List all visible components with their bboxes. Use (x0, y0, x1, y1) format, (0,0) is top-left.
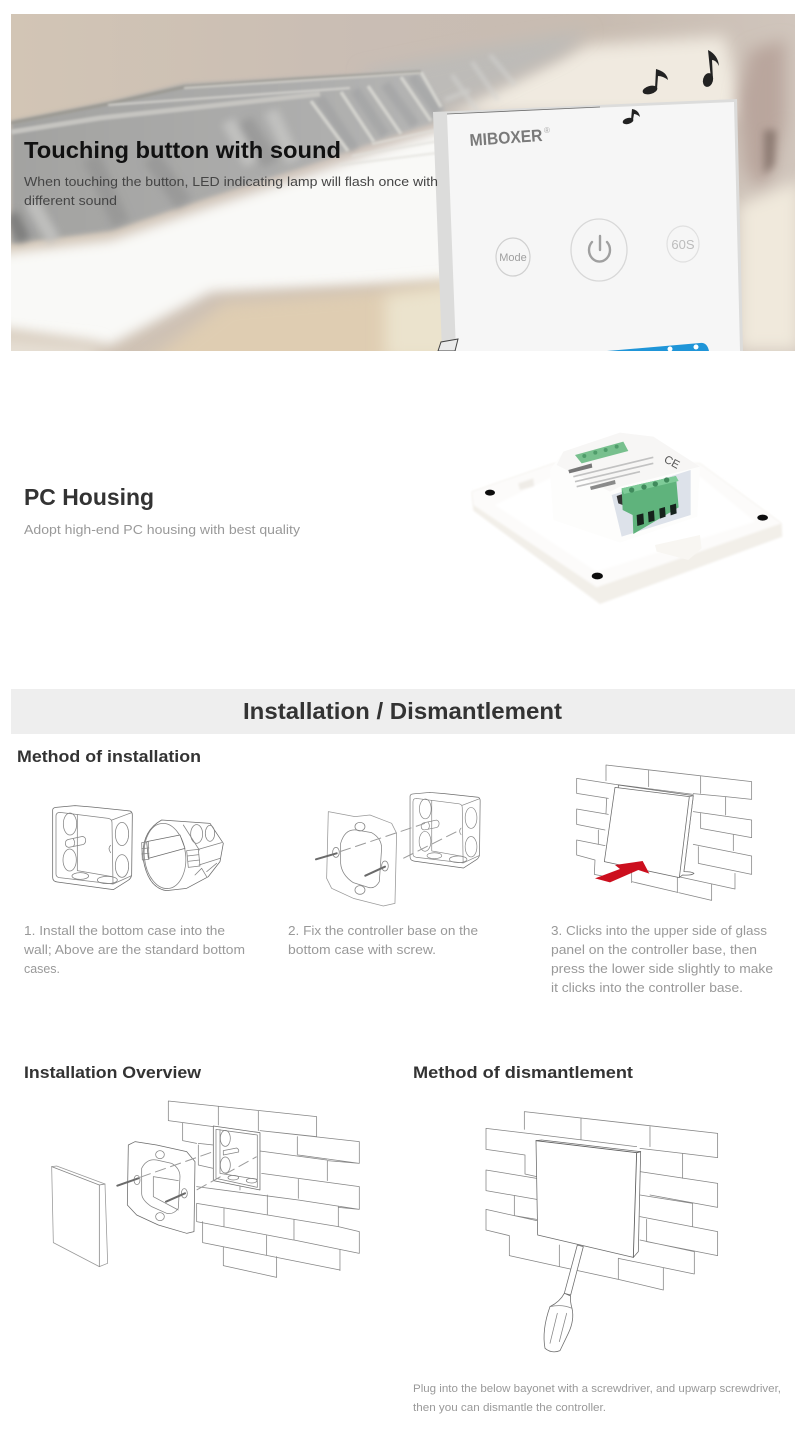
step 2 text (288, 923, 478, 957)
step 2 text: bottom case with screw. (288, 942, 436, 957)
step 3 illustration: panel clicks onto base (577, 765, 752, 900)
music note: large (642, 69, 668, 96)
glass panel (52, 1166, 108, 1267)
product photo: rear of housing (472, 433, 782, 604)
step 3 text: panel on the controller base, then (551, 942, 757, 957)
mounting plate (127, 1142, 195, 1233)
hero heading: Touching button with sound (24, 137, 341, 163)
hero description (24, 174, 438, 208)
section: PC housing (24, 433, 782, 604)
mode button (496, 238, 530, 276)
step 1 illustration: bottom cases (53, 806, 223, 891)
dismantlement illustration (486, 1112, 718, 1352)
round bottom case (141, 820, 223, 891)
hero banner: touching button with sound (0, 14, 800, 375)
heading: method of dismantlement: Method of dismantlement (413, 1063, 633, 1082)
hero description: different sound (24, 193, 117, 208)
section title bar: Installation / Dismantlement (243, 698, 562, 724)
hero photo: blurred piano keys (0, 14, 800, 375)
product photo: glass touch panel (433, 99, 743, 352)
step 1 text (23, 923, 245, 976)
heading: installation overview: Installation Overview (24, 1063, 202, 1082)
heading: method of installation: Method of installation (17, 747, 201, 766)
blue label strip (607, 343, 709, 352)
certification marks: CE (662, 454, 682, 472)
60s button: 60S (671, 237, 695, 252)
brand logo: MIBOXER (469, 126, 543, 150)
panel on wall (536, 1140, 641, 1257)
panel corner tab (438, 339, 458, 351)
registered mark: ® (544, 126, 550, 135)
step 1 text: 1. Install the bottom case into the (24, 923, 225, 938)
section title bar (11, 689, 795, 734)
hero description: When touching the button, LED indicating lamp will flash once with (24, 174, 438, 189)
dismantlement note: then you can dismantle the controller. (413, 1402, 606, 1414)
step 3 text (551, 923, 773, 995)
dismantlement note: Plug into the below bayonet with a screwdriver, and upwarp screwdriver, (413, 1383, 781, 1395)
wall box (213, 1126, 260, 1190)
installation overview illustration (52, 1101, 359, 1277)
step 2 text: 2. Fix the controller base on the (288, 923, 478, 938)
step 3 text: press the lower side slightly to make (551, 961, 773, 976)
housing description: Adopt high-end PC housing with best quality (24, 522, 301, 537)
music note: double flag (701, 50, 719, 88)
step 1 text: cases. (24, 961, 60, 976)
60s button (667, 226, 699, 262)
music note: small (622, 109, 640, 125)
step 1 text: wall; Above are the standard bottom (23, 942, 245, 957)
step 3 text: 3. Clicks into the upper side of glass (551, 923, 768, 938)
dismantlement note (413, 1383, 781, 1414)
red arrow (595, 861, 649, 882)
step 3 text: it clicks into the controller base. (551, 980, 743, 995)
power button (571, 219, 627, 281)
mode button: Mode (499, 252, 527, 264)
heading: PC housing: PC Housing (24, 484, 154, 510)
step 2 illustration: base and box (316, 792, 480, 906)
section: installation and dismantlement (11, 689, 795, 1414)
screws and guide lines (117, 1178, 185, 1202)
screwdriver (544, 1245, 583, 1352)
